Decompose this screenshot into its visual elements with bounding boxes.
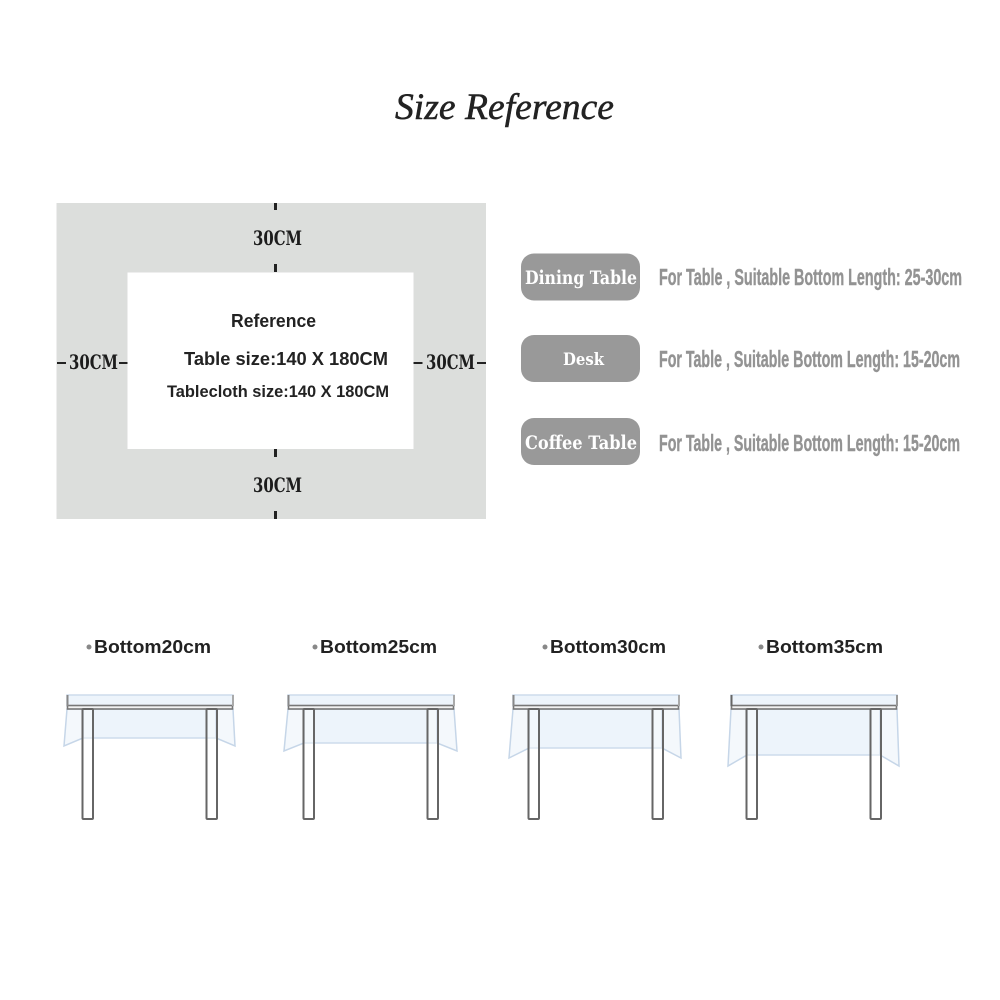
top measure: 30CM [253, 226, 302, 250]
table illustration: bottom 20cm [64, 695, 235, 819]
table size text: Table size:140 X 180CM [184, 349, 388, 369]
label: bottom 35cm: Bottom35cm [766, 637, 883, 657]
pill: desk [521, 335, 640, 382]
table illustration: bottom 30cm [509, 695, 681, 819]
left measure: 30CM [69, 350, 118, 374]
top measure [253, 203, 302, 272]
pill label: dining table: Dining Table [525, 267, 637, 289]
table illustration: bottom 25cm [284, 695, 457, 819]
right measure: 30CM [426, 350, 475, 374]
inner table area [128, 272, 414, 449]
tablecloth size text: Tablecloth size:140 X 180CM [167, 382, 389, 401]
label: bottom 30cm: Bottom30cm [550, 637, 666, 657]
pill label: desk: Desk [563, 350, 605, 370]
title: Size Reference [395, 87, 614, 128]
bottom measure [253, 449, 302, 519]
row: coffee table [521, 418, 960, 465]
table illustration: bottom 35cm [728, 695, 899, 819]
row: desk [521, 335, 960, 382]
pill label: coffee table: Coffee Table [525, 432, 637, 454]
bottom measure: 30CM [253, 473, 302, 497]
label: bottom 20cm: Bottom20cm [94, 637, 211, 657]
reference heading: Reference [231, 311, 316, 331]
pill: dining table [521, 254, 640, 300]
panel: size diagram [56, 203, 486, 519]
pill: coffee table [521, 418, 640, 465]
row: dining table [521, 254, 962, 300]
label: bottom 25cm: Bottom25cm [320, 637, 437, 657]
